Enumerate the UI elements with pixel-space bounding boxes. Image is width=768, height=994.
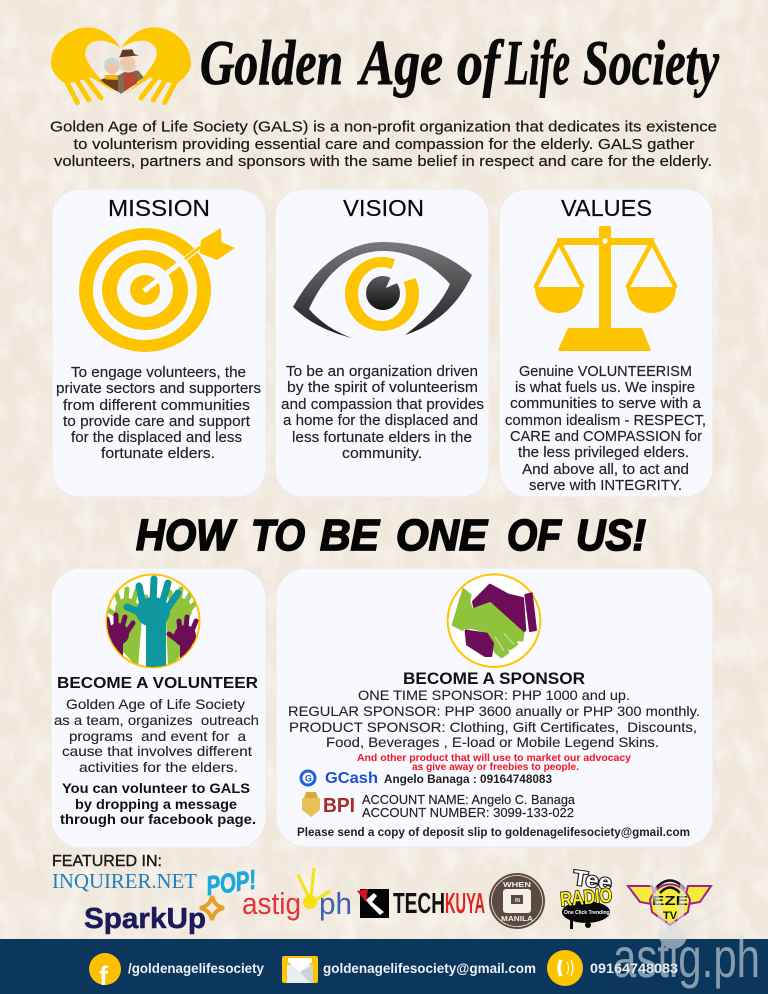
title	[200, 27, 719, 98]
bpi payment row	[302, 792, 576, 820]
section heading: how to be one of us	[136, 511, 646, 560]
volunteer call to action: through our facebook page.	[60, 811, 256, 827]
mission text: for the displaced and less	[71, 430, 242, 446]
section heading: how to be one of us: BE	[320, 511, 381, 560]
intro paragraph: to volunterism providing essential care and compassion for the elderly. GALS gather	[74, 136, 695, 153]
volunteer call to action	[60, 780, 256, 827]
logo: heart hands with elderly couple	[51, 27, 191, 103]
icon: mail	[282, 956, 318, 983]
logo: when in manila: MANILA	[501, 916, 533, 923]
vision text: community.	[342, 446, 422, 462]
section heading: how to be one of us: HOW	[136, 511, 237, 560]
icon: phone	[547, 950, 583, 986]
sponsor tiers: ONE TIME SPONSOR: PHP 1000 and up.	[358, 687, 630, 703]
heading: vision: VISION	[343, 195, 424, 221]
facebook handle: /goldenagelifesociety	[128, 960, 264, 976]
title: Golden	[200, 27, 343, 98]
mission text: To engage volunteers, the	[71, 365, 246, 381]
icon: handshake	[448, 574, 540, 667]
watermark: astig.ph	[613, 860, 760, 989]
logo: when in manila: IN	[515, 898, 520, 904]
mission text: from different communities	[63, 398, 250, 414]
left hand	[51, 27, 120, 103]
volunteer description: as a team, organizes outreach	[54, 712, 259, 728]
vision text	[281, 364, 484, 462]
values text	[505, 364, 706, 494]
vision text: by the spirit of volunteerism	[287, 380, 478, 396]
vision text: less fortunate elders in the	[292, 430, 472, 446]
logo: astig.ph	[242, 868, 352, 921]
logo: inquirer.net: INQUIRER.NET	[52, 869, 197, 893]
values text: And above all, to act and	[522, 462, 689, 478]
volunteer description: activities for the elders.	[79, 759, 238, 775]
logo: eze tv	[628, 880, 711, 925]
logo: astig.ph: astig	[242, 886, 301, 921]
logo: eze tv: EZE	[652, 893, 688, 908]
elderly couple	[100, 49, 144, 94]
volunteer description	[54, 696, 259, 775]
values text: the less privileged elders.	[518, 445, 689, 461]
volunteer call to action: by dropping a message	[75, 796, 237, 812]
volunteer description: cause that involves different	[62, 743, 252, 759]
heading: mission: MISSION	[108, 195, 210, 221]
gcash payment row: G	[305, 774, 312, 784]
logo: techkuya	[357, 888, 485, 920]
gcash payment row	[301, 770, 552, 787]
vision text: a home for the displaced and	[283, 413, 478, 429]
intro paragraph	[50, 118, 717, 170]
logo: tee radio: Tee	[572, 866, 613, 895]
heading: become a volunteer: BECOME A VOLUNTEER	[57, 675, 258, 692]
gcash payment row: GCash	[325, 770, 378, 787]
title: Society	[583, 27, 719, 98]
gcash payment row: Angelo Banaga : 09164748083	[384, 772, 552, 786]
vision text: and compassion that provides	[281, 397, 484, 413]
section heading: how to be one of us: TO	[251, 511, 305, 560]
logo: tee radio	[559, 866, 613, 929]
title: Age	[357, 27, 443, 98]
panel: values	[499, 189, 713, 497]
intro paragraph: volunteers, partners and sponsors with the same belief in respect and care for the elderly.	[54, 153, 712, 170]
red note: And other product that will use to market our advocacy	[357, 752, 631, 764]
volunteer description: programs and event for a	[69, 728, 246, 744]
panel: mission	[52, 189, 266, 497]
logo: tee radio: One Click Trending	[564, 910, 610, 916]
section heading: how to be one of us: ONE	[396, 511, 489, 560]
sponsor tiers: PRODUCT SPONSOR: Clothing, Gift Certificates, Discounts,	[289, 719, 697, 735]
section heading: how to be one of us: US!	[576, 511, 646, 560]
section heading: how to be one of us: OF	[507, 511, 562, 560]
logo: when in manila	[489, 873, 545, 929]
values text: common idealism - RESPECT,	[505, 413, 706, 429]
values text: communities to serve with a	[510, 396, 702, 412]
logo: techkuya: TECH	[393, 888, 445, 920]
logo: pop: POP!	[204, 865, 258, 901]
icon: raised hands	[106, 574, 200, 668]
phone number: 09164748083	[590, 960, 678, 976]
mission text	[56, 365, 261, 462]
logo: when in manila: WHEN	[503, 882, 531, 889]
heading: values: VALUES	[561, 195, 652, 221]
values text: Genuine VOLUNTEERISM	[519, 364, 692, 380]
vision text: To be an organization driven	[286, 364, 478, 380]
panel: become a sponsor	[276, 568, 713, 847]
red note	[357, 752, 631, 773]
red note: as give away or freebies to people.	[412, 761, 579, 773]
icon: balance scale	[535, 226, 676, 351]
bpi payment row: BPI	[323, 795, 355, 817]
sponsor tiers	[288, 687, 700, 750]
panel: become a volunteer	[51, 568, 266, 848]
logo: techkuya: KUYA	[445, 888, 485, 920]
mission text: private sectors and supporters	[56, 381, 261, 397]
icon: facebook	[89, 953, 121, 991]
panel: vision	[275, 189, 489, 497]
logo: astig.ph: ph	[319, 886, 352, 921]
intro paragraph: Golden Age of Life Society (GALS) is a non-profit organization that dedicates its existence	[50, 118, 717, 136]
logo: eze tv: TV	[663, 910, 678, 922]
values text: is what fuels us. We inspire	[515, 380, 695, 396]
icon: target with arrow	[79, 228, 235, 352]
logo: sparkup	[84, 896, 224, 935]
icon: facebook: f	[99, 961, 109, 991]
right hand	[122, 27, 191, 103]
mission text: to provide care and support	[63, 414, 250, 430]
mission text: fortunate elders.	[101, 446, 215, 462]
volunteer description: Golden Age of Life Society	[66, 696, 245, 712]
icon: eye	[293, 242, 472, 338]
sponsor tiers: REGULAR SPONSOR: PHP 3600 anually or PHP 300 monthly.	[288, 703, 700, 719]
bpi payment row: ACCOUNT NUMBER: 3099-133-022	[362, 805, 574, 820]
values text: CARE and COMPASSION for	[510, 429, 702, 445]
values text: serve with INTEGRITY.	[529, 478, 682, 494]
footer bar	[0, 939, 768, 994]
deposit slip note: Please send a copy of deposit slip to goldenagelifesociety@gmail.com	[297, 825, 690, 839]
volunteer call to action: You can volunteer to GALS	[62, 780, 250, 796]
logo: tee radio: RADIO	[559, 885, 613, 911]
title: of	[457, 27, 505, 98]
sponsor tiers: Food, Beverages , E-load or Mobile Legend Skins.	[326, 734, 659, 750]
featured in heading: FEATURED IN:	[52, 853, 162, 870]
email address: goldenagelifesociety@gmail.com	[323, 960, 536, 976]
heading: become a sponsor: BECOME A SPONSOR	[403, 669, 585, 688]
logo: sparkup: SparkUp	[84, 903, 206, 935]
bpi payment row: ACCOUNT NAME: Angelo C. Banaga	[362, 792, 576, 807]
title: Life	[504, 27, 570, 98]
